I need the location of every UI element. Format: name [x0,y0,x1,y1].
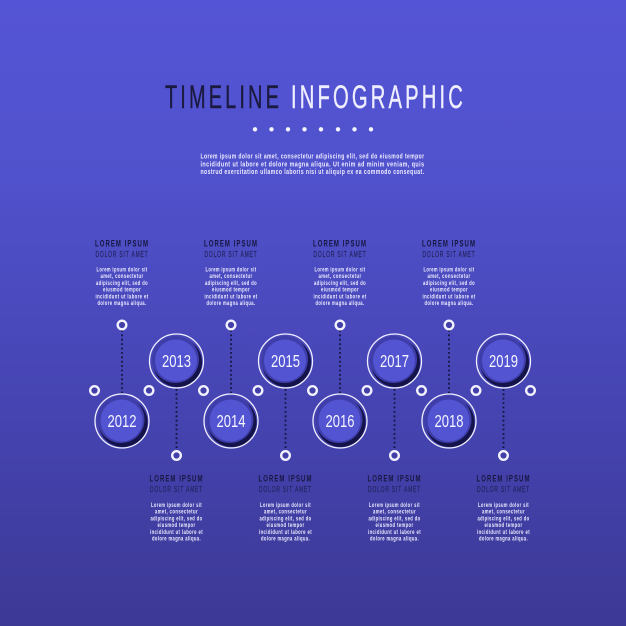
text block: 2019: adipiscing elit, sed do [478,515,530,522]
text block: 2017 [368,474,422,542]
text block: 2014: dolore magna aliqua. [206,300,256,307]
text block: 2017: amet, consectetur [373,509,416,516]
text block: 2013: DOLOR SIT AMET [150,484,203,494]
text block: 2012: Lorem ipsum dolor sit [96,266,148,274]
text block: 2012: dolore magna aliqua. [98,300,146,307]
text block: 2019: LOREM IPSUM [476,474,530,484]
year badge: 2013 [150,334,204,388]
title: INFOGRAPHIC [291,79,466,115]
text block: 2013: dolore magna aliqua. [152,536,201,542]
text block: 2012: eiusmod tempor [103,287,141,294]
text block: 2012: adipiscing elit, sed do [96,280,148,287]
text block: 2013: Lorem ipsum dolor sit [151,502,202,509]
text block: 2012: amet, consectetur [100,273,144,280]
text block: 2014: Lorem ipsum dolor sit [206,266,256,274]
year badge: 2017: 2017 [380,351,409,371]
text block: 2012: DOLOR SIT AMET [96,249,148,259]
year badge: 2015: 2015 [271,351,300,371]
year badge: 2019: 2019 [489,351,518,371]
title [165,79,466,115]
text block: 2018: eiusmod tempor [430,287,468,294]
text block: 2019: eiusmod tempor [484,522,522,529]
text block: 2015: DOLOR SIT AMET [259,484,312,494]
intro text: incididunt ut labore et dolore magna aliqua. Ut enim ad minim veniam, quis [200,159,424,168]
text block: 2018: Lorem ipsum dolor sit [424,266,474,274]
text block: 2015 [258,474,312,542]
text block: 2015: amet, consectetur [264,509,307,516]
text block: 2015: dolore magna aliqua. [261,536,310,542]
year badge: 2019 [476,334,530,388]
year badge: 2017 [368,334,422,388]
year badge: 2016 [313,394,367,448]
text block: 2016: Lorem ipsum dolor sit [314,266,366,274]
year badge: 2014 [204,394,258,448]
connector lines [122,330,504,450]
text block: 2019: dolore magna aliqua. [479,536,528,542]
year badge: 2012: 2012 [108,411,136,431]
text block: 2013: adipiscing elit, sed do [150,515,202,522]
text block: 2017: Lorem ipsum dolor sit [369,502,420,509]
text block: 2013: LOREM IPSUM [150,474,204,484]
dotted separator [253,127,373,132]
text block: 2014: incididunt ut labore et [204,293,258,300]
year badge: 2018: 2018 [434,411,464,431]
text block: 2018: amet, consectetur [428,273,470,280]
text block: 2015: eiusmod tempor [266,522,304,529]
text block: 2019: amet, consectetur [482,509,525,516]
text block: 2016: dolore magna aliqua. [316,300,364,307]
text block: 2013: incididunt ut labore et [150,529,203,536]
text block: 2017: adipiscing elit, sed do [368,515,420,522]
text block: 2017: eiusmod tempor [376,522,414,529]
text block: 2017: DOLOR SIT AMET [368,484,421,494]
text block: 2018: incididunt ut labore et [422,293,476,300]
text block: 2017: incididunt ut labore et [368,529,421,536]
intro text: Lorem ipsum dolor sit amet, consectetur adipiscing elit, sed do eiusmod tempor [200,152,424,160]
text block: 2012: LOREM IPSUM [95,238,149,248]
year badge: 2015 [258,334,312,388]
text block: 2016: eiusmod tempor [321,287,359,294]
text block: 2018: dolore magna aliqua. [424,300,474,307]
text block: 2015: Lorem ipsum dolor sit [260,502,311,509]
title: TIMELINE [165,79,282,115]
text block: 2014: DOLOR SIT AMET [204,249,258,259]
text block: 2017: LOREM IPSUM [368,474,422,484]
text block: 2015: incididunt ut labore et [259,529,312,536]
year badge: 2018 [422,394,476,448]
text block: 2019 [476,474,530,542]
text block: 2017: dolore magna aliqua. [370,536,419,542]
text block: 2016 [313,238,367,307]
timeline nodes [90,321,535,460]
text block: 2019: DOLOR SIT AMET [477,484,530,494]
intro text: nostrud exercitation ullamco laboris nisi ut aliquip ex ea commodo consequat. [200,167,424,176]
text block: 2016: amet, consectetur [318,273,362,280]
text block: 2013 [150,474,204,542]
text block: 2015: adipiscing elit, sed do [260,515,312,522]
text block: 2013: amet, consectetur [155,509,198,516]
text block: 2018: LOREM IPSUM [422,238,476,248]
text block: 2019: Lorem ipsum dolor sit [478,502,529,509]
text block: 2016: DOLOR SIT AMET [314,249,366,259]
text block: 2013: eiusmod tempor [158,522,196,529]
intro text [200,152,424,176]
text block: 2014 [204,238,258,307]
text block: 2018 [422,238,476,307]
year badge: 2012 [95,394,149,448]
text block: 2018: DOLOR SIT AMET [422,249,476,259]
text block: 2018: adipiscing elit, sed do [423,280,475,287]
text block: 2019: incididunt ut labore et [477,529,530,536]
text block: 2014: adipiscing elit, sed do [205,280,257,287]
text block: 2014: LOREM IPSUM [204,238,258,248]
text block: 2016: adipiscing elit, sed do [314,280,366,287]
year badge: 2014: 2014 [216,411,246,431]
text block: 2014: eiusmod tempor [212,287,250,294]
year badge: 2013: 2013 [162,351,191,371]
text block: 2014: amet, consectetur [210,273,252,280]
year badge: 2016: 2016 [326,411,354,431]
text block: 2012 [95,238,149,307]
text block: 2016: LOREM IPSUM [313,238,367,248]
text block: 2015: LOREM IPSUM [258,474,312,484]
text block: 2016: incididunt ut labore et [314,293,366,300]
text block: 2012: incididunt ut labore et [96,293,148,300]
